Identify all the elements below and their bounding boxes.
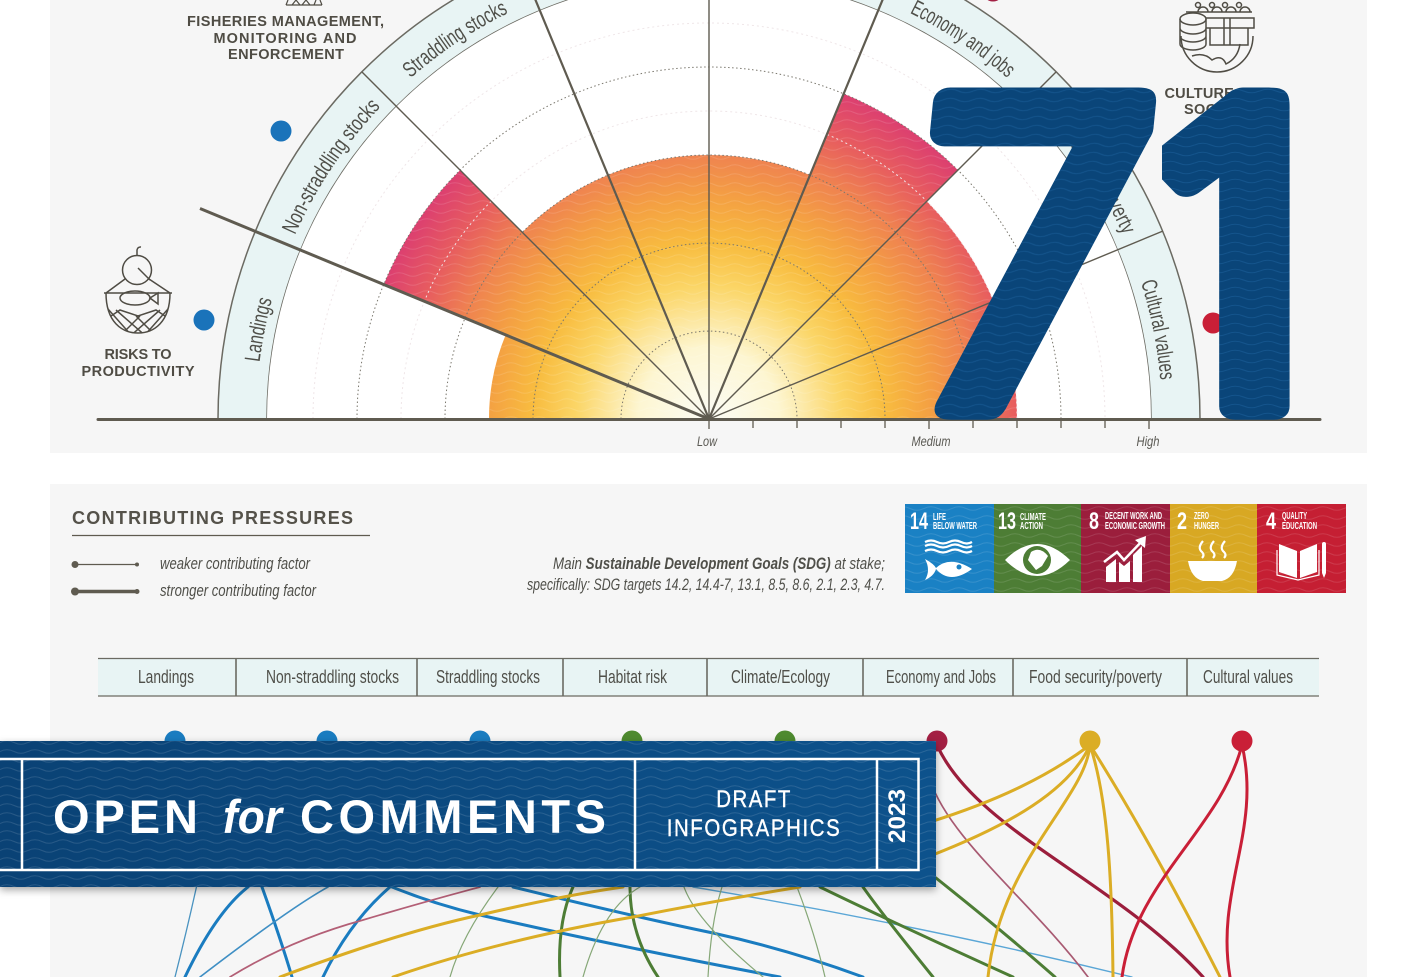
banner year: 2023 (884, 789, 911, 843)
banner subtitle (667, 785, 841, 841)
panel: contributing pressures (50, 484, 1367, 977)
radar dots (194, 0, 1224, 334)
tile: SDG 2: 2 (1177, 508, 1187, 535)
tile: SDG 13 (994, 504, 1081, 593)
ring band (218, 0, 1200, 419)
banner subtitle: INFOGRAPHICS (667, 814, 841, 841)
tile: SDG 8: ECONOMIC GROWTH (1105, 521, 1165, 532)
tile: SDG 8 (1081, 504, 1170, 593)
tile: SDG 4: EDUCATION (1282, 521, 1317, 532)
caption: culture and society: SOCIETY (1184, 102, 1250, 118)
tile: SDG 13: CLIMATE (1020, 512, 1046, 523)
tile: SDG 4 (1257, 504, 1346, 593)
ring labels: Landings (244, 298, 274, 361)
big number 71 (930, 88, 1290, 420)
axis labels: High (1136, 433, 1160, 449)
ring labels: Cultural values (1142, 280, 1174, 380)
green links (450, 878, 1055, 977)
caption: culture and society: CULTURE AND (1164, 86, 1270, 102)
category header band: Landings (138, 667, 194, 687)
maroon links (230, 745, 1203, 977)
data sectors (384, 94, 1017, 419)
tile: SDG 2 (1170, 504, 1257, 593)
legend heading: CONTRIBUTING PRESSURES (72, 508, 353, 528)
red links (1122, 745, 1247, 977)
big number 71: 7 (876, 61, 1184, 473)
legend: weaker (72, 554, 311, 573)
category header band: Climate/Ecology (731, 667, 830, 687)
ring labels: Food security/poverty (1071, 146, 1134, 232)
category header band: Non-straddling stocks (266, 667, 399, 687)
tile: SDG 13: ACTION (1020, 521, 1043, 532)
tile: SDG 4: QUALITY (1282, 511, 1307, 522)
big number 71: 1 (1097, 61, 1390, 473)
category header band: Cultural values (1203, 667, 1293, 687)
network: pressure links (175, 745, 1247, 977)
banner: open for comments (0, 741, 936, 887)
axis labels: Low (697, 433, 718, 449)
spokes (200, 0, 1163, 419)
tile: SDG 14: 14 (910, 508, 928, 535)
axis labels: Medium (912, 433, 951, 449)
SDG note: Main Sustainable Development Goals (SDG) at stake; (553, 554, 885, 573)
caption: risks to productivity (82, 347, 195, 380)
tile: SDG 14: LIFE (933, 512, 946, 523)
caption: culture and society (1164, 86, 1270, 118)
caption: fisheries: ENFORCEMENT (228, 47, 344, 63)
network: nodes (164, 730, 1252, 752)
caption: risks to productivity: PRODUCTIVITY (82, 364, 195, 380)
blue links (175, 880, 1132, 977)
SDG tiles (905, 504, 1346, 593)
caption: risks to productivity: RISKS TO (104, 347, 172, 363)
tile: SDG 4: 4 (1266, 508, 1276, 535)
banner title (53, 790, 606, 843)
banner title: for (223, 790, 285, 843)
tile: SDG 14: BELOW WATER (933, 521, 977, 532)
axis (98, 420, 1320, 429)
axis labels (697, 433, 1160, 449)
category header band: Economy and Jobs (886, 667, 996, 687)
tile: SDG 14 (905, 504, 994, 593)
tile: SDG 2: ZERO (1194, 511, 1209, 522)
icon: fish in net (104, 246, 172, 334)
radar interior (267, 0, 1151, 419)
panel: risk radar (50, 0, 1367, 453)
ring labels (244, 0, 1174, 380)
category header band: Habitat risk (598, 667, 668, 687)
icon: culture and society (1180, 2, 1254, 72)
ring labels: Non-straddling stocks (282, 100, 380, 234)
caption: fisheries (187, 14, 384, 63)
caption: fisheries: MONITORING AND (214, 31, 356, 47)
banner title: COMMENTS (300, 790, 606, 843)
legend: stronger (71, 581, 317, 600)
category header band: Straddling stocks (436, 667, 540, 687)
legend: stronger: stronger contributing factor (160, 581, 317, 600)
SDG note (527, 554, 885, 594)
banner frame (0, 759, 918, 870)
caption: fisheries: FISHERIES MANAGEMENT, (187, 14, 384, 30)
banner subtitle: DRAFT (716, 785, 792, 812)
category header band (98, 658, 1319, 696)
legend: weaker: weaker contributing factor (160, 554, 311, 573)
tile: SDG 2: HUNGER (1194, 521, 1219, 532)
tile: SDG 13: 13 (998, 508, 1016, 535)
SDG note: specifically: SDG targets 14.2, 14.4-7, 13.1, 8.5, 8.6, 2.1, 2.3, 4.7. (527, 575, 885, 594)
tile: SDG 8: 8 (1089, 508, 1099, 535)
icon: fisheries (286, 0, 322, 5)
tile: SDG 8: DECENT WORK AND (1105, 511, 1162, 522)
banner title: OPEN (53, 790, 198, 843)
gold links (280, 745, 1220, 977)
category header band: Food security/poverty (1029, 667, 1162, 687)
